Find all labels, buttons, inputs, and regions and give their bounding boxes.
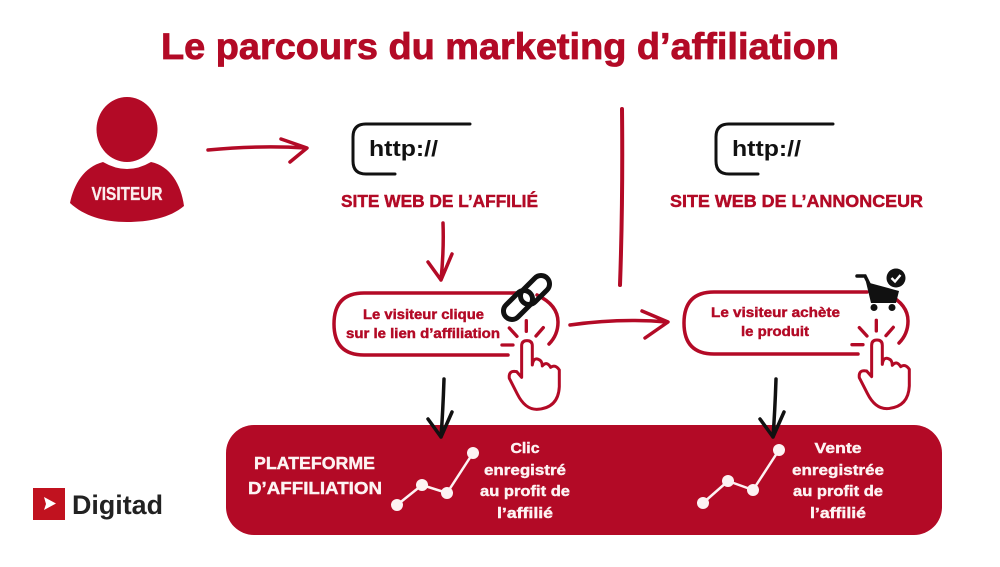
chart: sales [697, 444, 785, 509]
icon: advertiser url bar [716, 124, 833, 174]
icon: clicking hand right [852, 320, 909, 409]
heading: affiliate site: SITE WEB DE L’AFFILIÉ [341, 190, 538, 211]
icon: visitor: VISITEUR [92, 184, 162, 204]
panel: purchase pill [684, 292, 908, 354]
icon: affiliate url bar: http:// [369, 136, 438, 161]
arrow: click to platform [428, 379, 452, 437]
text: purchase [711, 304, 840, 339]
icon: advertiser url bar: http:// [732, 136, 801, 161]
text: purchase: Le visiteur achète [711, 304, 840, 320]
text: sale recorded [792, 440, 884, 522]
text: click recorded: au profit de [480, 483, 570, 500]
text: click: Le visiteur clique [363, 306, 484, 322]
heading: advertiser site: SITE WEB DE L’ANNONCEUR [670, 191, 923, 211]
text: sale recorded: au profit de [793, 483, 883, 500]
text: click [346, 306, 500, 341]
text: sale recorded: Vente [814, 440, 862, 457]
divider line [620, 109, 622, 285]
icon: visitor [70, 97, 184, 222]
panel: affiliation platform [226, 425, 942, 535]
arrow: click to purchase [570, 311, 668, 338]
text: click recorded: Clic [510, 440, 540, 457]
arrow: site to click [428, 223, 452, 280]
text: click recorded [480, 440, 570, 522]
icon: clicking hand left [502, 321, 559, 409]
chart: clicks [391, 447, 479, 511]
heading: platform: PLATEFORME [254, 453, 375, 473]
text: click: sur le lien d’affiliation [346, 325, 500, 341]
text: sale recorded: l’affilié [810, 505, 866, 522]
title: Le parcours du marketing d’affiliation [161, 26, 839, 67]
text: click recorded: l’affilié [497, 505, 553, 522]
arrow: visitor to affiliate site [208, 139, 307, 162]
logo: Digitad: Digitad [72, 490, 163, 520]
text: click recorded: enregistré [484, 462, 566, 479]
icon: shopping cart [857, 268, 906, 311]
text: purchase: le produit [741, 323, 809, 339]
panel: click pill [334, 293, 558, 355]
icon: chain link [500, 272, 553, 323]
text: sale recorded: enregistrée [792, 462, 884, 479]
logo: Digitad [33, 488, 163, 520]
arrow: purchase to platform [760, 379, 784, 437]
heading: platform [248, 453, 382, 498]
heading: platform: D’AFFILIATION [248, 478, 382, 498]
icon: affiliate url bar [353, 124, 470, 174]
